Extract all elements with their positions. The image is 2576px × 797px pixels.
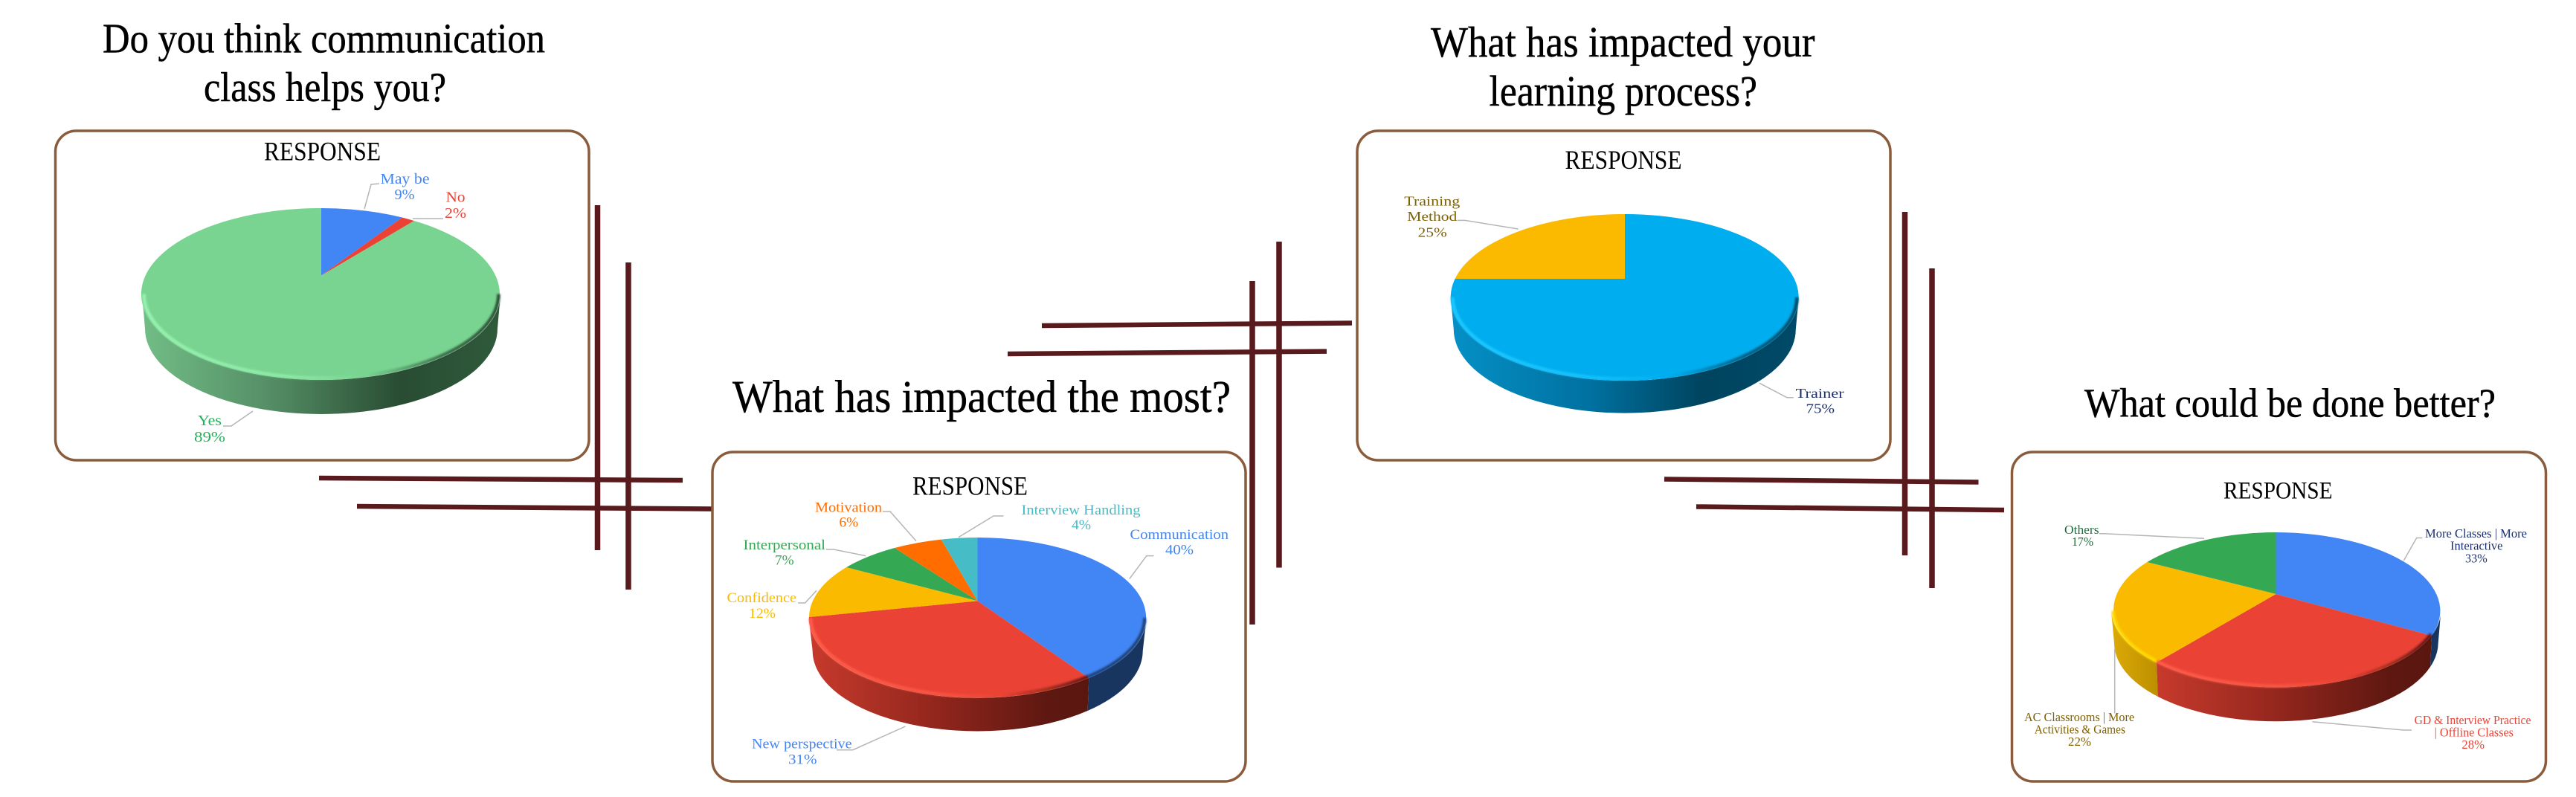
label: AC Classrooms More Activities and Games 22%: 22% — [2068, 735, 2091, 749]
label: More Classes More Interactive 33%: 33% — [2465, 551, 2488, 565]
label: Interview Handling 4% — [1022, 503, 1141, 533]
label: Training Method 25%: 25% — [1418, 225, 1447, 239]
label: Motivation 6%: 6% — [839, 515, 858, 531]
title: what has impacted the most: What has impacted the most? — [732, 372, 1231, 422]
label: AC Classrooms More Activities and Games 22%: AC Classrooms | More — [2024, 710, 2134, 724]
label: Training Method 25% — [1404, 193, 1460, 239]
label: GD and Interview Practice Offline Classes 28% — [2415, 713, 2531, 752]
label: Interpersonal 7%: 7% — [775, 553, 794, 568]
label: Yes 89%: 89% — [194, 429, 225, 445]
label: New perspective 31%: 31% — [788, 752, 817, 767]
title: communication class question: Do you think communication — [103, 16, 545, 62]
label: New perspective 31%: New perspective — [752, 737, 852, 752]
label: Others 17%: Others — [2064, 523, 2099, 537]
label: Confidence 12% — [727, 590, 796, 622]
label: Communication 40% — [1130, 527, 1229, 558]
label: GD and Interview Practice Offline Classes 28%: 28% — [2461, 738, 2485, 752]
label: More Classes More Interactive 33% — [2425, 526, 2527, 565]
label: Interview Handling 4%: 4% — [1072, 517, 1091, 533]
label: No 2%: 2% — [445, 205, 466, 222]
leader lines — [1458, 220, 1794, 398]
label: Interpersonal 7%: Interpersonal — [744, 538, 825, 553]
label: No 2%: No — [446, 189, 466, 205]
panel: what could be done better — [2012, 452, 2546, 781]
label: Motivation 6% — [815, 500, 883, 531]
label: May be 9%: May be — [381, 171, 430, 187]
title: what has impacted your learning process — [1431, 18, 1815, 115]
3D pie chart — [2111, 532, 2441, 721]
label: Interview Handling 4%: Interview Handling — [1022, 503, 1141, 518]
panel: communication class helps — [55, 131, 589, 460]
panel frame — [1357, 131, 1890, 460]
label: GD and Interview Practice Offline Classes 28%: | Offline Classes — [2435, 725, 2514, 739]
3D pie chart — [809, 538, 1147, 731]
label: No 2% — [445, 189, 466, 222]
label: Trainer 75%: Trainer — [1796, 386, 1844, 401]
panel: learning process — [1357, 131, 1890, 460]
title: communication class question: class helps you? — [204, 65, 446, 111]
label: More Classes More Interactive 33%: Interactive — [2450, 539, 2503, 553]
label: New perspective 31% — [752, 737, 852, 767]
label: GD and Interview Practice Offline Classes 28%: GD & Interview Practice — [2415, 713, 2531, 727]
label: Training Method 25%: Training — [1404, 193, 1460, 208]
label: AC Classrooms More Activities and Games 22%: Activities & Games — [2035, 723, 2125, 737]
label: Confidence 12%: 12% — [749, 606, 776, 622]
label: Interpersonal 7% — [744, 538, 825, 568]
panel frame — [712, 452, 1246, 781]
label: Confidence 12%: Confidence — [727, 590, 796, 606]
panel frame — [2012, 452, 2546, 781]
chart heading: RESPONSE — [1565, 145, 1682, 175]
label: Training Method 25%: Method — [1407, 209, 1457, 224]
panel frame — [55, 131, 589, 460]
label: Yes 89% — [194, 413, 225, 445]
label: AC Classrooms More Activities and Games 22% — [2024, 710, 2134, 749]
label: Trainer 75% — [1796, 386, 1844, 416]
chart heading: RESPONSE — [2224, 477, 2332, 504]
title: what could be done better: What could be done better? — [2084, 380, 2496, 425]
label: Communication 40%: 40% — [1165, 543, 1194, 558]
leader lines — [798, 512, 1154, 750]
title: communication class question — [103, 16, 545, 111]
label: Others 17%: 17% — [2072, 535, 2093, 549]
3D pie chart — [141, 208, 500, 414]
label: Others 17% — [2064, 523, 2099, 549]
connector lines: cross between panel 3 and panel 4 — [1664, 212, 2004, 588]
chart heading: RESPONSE — [264, 137, 381, 167]
label: May be 9%: 9% — [394, 187, 415, 203]
label: More Classes More Interactive 33%: More Classes | More — [2425, 526, 2527, 541]
title: what has impacted your learning process: What has impacted your — [1431, 18, 1815, 66]
label: Trainer 75%: 75% — [1806, 401, 1835, 416]
panel: what has impacted the most — [712, 452, 1246, 781]
title: what has impacted your learning process: learning process? — [1489, 67, 1757, 115]
leader lines — [223, 184, 443, 426]
leader lines — [2099, 534, 2423, 730]
label: Yes 89%: Yes — [198, 413, 222, 429]
chart heading: RESPONSE — [912, 471, 1028, 501]
connector lines: cross between panel 2 and panel 3 — [1008, 242, 1352, 625]
label: May be 9% — [381, 171, 430, 203]
3D pie chart — [1451, 214, 1799, 413]
label: Communication 40%: Communication — [1130, 527, 1229, 543]
connector lines: cross between panel 1 and panel 2 — [319, 205, 712, 590]
label: Motivation 6%: Motivation — [815, 500, 883, 516]
